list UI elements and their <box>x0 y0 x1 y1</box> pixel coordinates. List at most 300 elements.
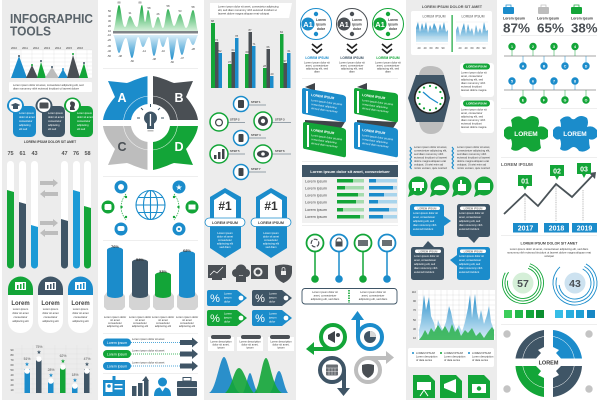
pill arrows: Lorem ipsum <box>107 364 127 368</box>
heading and text: ring charts: LOREM IPSUM DOLOR SIT AMET <box>521 242 578 246</box>
curl arrow blue <box>351 311 382 349</box>
mini text cards: dolor sit amet, <box>273 342 290 346</box>
quadrant diagram: D <box>174 140 184 154</box>
zigzag text columns: euismod tincidunt ut laoreet <box>457 156 490 160</box>
speech bubble blue bottom right: adipiscing elit, sed <box>459 262 481 266</box>
globe network <box>102 180 198 236</box>
star bar chart: ★ <box>73 377 78 384</box>
chevrons and labels <box>304 44 401 74</box>
stats: briefcase percentages: 65% <box>537 20 564 36</box>
line chart with callouts: 01 <box>521 178 529 186</box>
zigzag text columns: volutpat. Ut wisi enim ad <box>414 162 444 166</box>
icon callout: dark: consectetur <box>48 119 62 123</box>
percent tag blue 2 <box>252 310 292 326</box>
area chart: positive green and negative blue: -47 <box>180 56 184 60</box>
pill: dark lorem <box>38 276 63 333</box>
line chart with callouts: 02 <box>553 168 561 176</box>
grouped bar chart: 88 <box>211 19 214 23</box>
area chart: positive green and negative blue: -14 <box>142 49 146 53</box>
area chart: positive green and negative blue <box>107 0 198 64</box>
icon callout: blue: elit sed <box>19 127 28 131</box>
arrows: grey exchange <box>40 179 58 237</box>
chevrons and labels: adipiscing elit, sed <box>377 66 399 70</box>
3D ribbons: consectetur adipiscing <box>362 137 388 145</box>
3D columns chart: 76% <box>111 244 119 249</box>
grouped bar chart: 84 <box>280 30 283 34</box>
vertical bar values: 43 <box>31 151 38 157</box>
heading and text: ring charts <box>507 242 591 258</box>
chevrons and labels: diam <box>349 70 356 74</box>
dual spark charts: 20 <box>458 46 462 50</box>
speech bubble dark top right <box>457 204 490 243</box>
text bar <box>302 288 397 304</box>
A1 ring dark: dolor <box>353 27 362 31</box>
3D columns chart: sit amet <box>135 318 145 322</box>
grouped bar chart: 66 <box>266 45 270 49</box>
ring chart green 57 <box>497 257 549 309</box>
vertical bar values <box>7 151 91 157</box>
A1 ring dark <box>336 8 368 40</box>
watch text card 2 <box>460 100 494 133</box>
area chart: positive green and negative blue: -40 <box>107 49 111 53</box>
quadrant diagram: A <box>117 91 127 105</box>
A1 ring blue <box>300 8 332 40</box>
3D ribbons: LOREM IPSUM <box>311 93 335 100</box>
step cycle: STEP 7 <box>251 167 261 171</box>
star bar chart: 40 <box>10 373 14 377</box>
zigzag text columns: dolore magna aliquam erat <box>457 159 489 163</box>
zigzag text columns: sed diam nonummy nibh <box>457 152 487 156</box>
caption box column 3 <box>210 3 292 18</box>
area chart: positive green and negative blue: -48 <box>152 57 156 61</box>
icon callout: blue <box>7 98 36 137</box>
speech bubble blue top left: diam nonummy nibh <box>413 223 437 227</box>
chevrons and labels: LOREM IPSUM <box>376 56 400 60</box>
speech bubble blue top left: LOREM IPSUM <box>418 206 437 210</box>
grouped bar chart <box>211 19 291 88</box>
speech bubble blue bottom right: diam nonummy nibh <box>459 266 483 270</box>
3D columns chart: Lorem ipsum dolor <box>176 315 198 319</box>
speech bubble dark bottom left <box>411 241 444 280</box>
vertical bar values: 58 <box>84 151 91 157</box>
A1 ring blue: A1 <box>303 20 313 29</box>
area chart: positive green and negative blue: 40 <box>108 14 111 18</box>
timeline 1: 3 <box>553 45 555 49</box>
icon: globe <box>136 190 165 220</box>
icon callout: blue: adipiscing <box>19 123 31 127</box>
zigzag text columns: sed diam nonummy nibh <box>414 152 444 156</box>
jagged area chart: 50 <box>413 318 416 322</box>
panel: column 3 background <box>204 0 296 400</box>
icon callout: dark: adipiscing <box>48 123 60 127</box>
title: INFOGRAPHIC <box>10 12 93 26</box>
chart legend: Lorem description <box>472 354 494 358</box>
chevrons and labels: adipiscing elit, sed <box>306 66 328 70</box>
speech bubble dark bottom left: amet, consectetuer <box>414 258 436 262</box>
dual spark charts: 90 <box>482 46 486 50</box>
icon circles: blue <box>114 180 186 236</box>
star bar chart: 18% <box>72 373 78 377</box>
triangle chart: 2013 <box>44 46 50 50</box>
caption box: diam nonummy nibh euismod tincidunt ut laoreet dolore <box>13 86 80 90</box>
quadrant C <box>103 126 148 170</box>
vertical bar values: 47 <box>61 151 68 157</box>
speech bubble dark top right: amet, consectetuer <box>459 215 481 219</box>
icon: cloud <box>232 264 250 282</box>
3D columns chart: consectetur <box>133 321 147 325</box>
3D columns chart: adipiscing elit <box>155 324 171 328</box>
3D columns chart: adipiscing elit <box>179 324 195 328</box>
timeline 2: O <box>585 98 588 102</box>
3D columns chart: sit amet <box>182 318 192 322</box>
timeline 2: F <box>543 98 546 102</box>
grouped bar chart: 37 <box>284 59 287 63</box>
quadrant A <box>103 76 148 120</box>
star bar chart: ★ <box>61 358 66 365</box>
percent tag green: Lorem <box>224 312 233 316</box>
star bar chart: ★ <box>85 361 90 368</box>
star bar chart: 28% <box>48 368 54 372</box>
speech bubble dark top right: adipiscing elit, sed <box>459 219 481 223</box>
step cycle <box>210 96 291 180</box>
lower quadrant circle: LOREM <box>539 360 559 366</box>
panel: column 1 background <box>2 0 98 400</box>
line chart with callouts <box>504 163 597 232</box>
percent tag green <box>207 310 247 326</box>
A1 ring green: dolor <box>389 27 398 31</box>
watch text card 1: amet, consectetur <box>461 74 482 78</box>
grouped bar chart: 78 <box>235 34 238 38</box>
dual spark charts: 40 <box>464 46 468 50</box>
icon callout: green: adipiscing <box>77 123 89 127</box>
dual spark charts: 80 <box>476 46 480 50</box>
3D ribbons: consectetur adipiscing <box>362 102 388 110</box>
watch <box>408 66 450 134</box>
curl arrow dark <box>320 358 350 396</box>
panel: column 5 background <box>406 0 497 400</box>
title <box>10 12 93 38</box>
hexagon badge right <box>251 188 291 258</box>
speech bubble blue top left: Lorem ipsum dolor sit <box>413 211 438 215</box>
3D ribbons: LOREM IPSUM <box>362 93 386 100</box>
mini text cards: ipsum <box>217 346 225 350</box>
chart legend: LOREM IPSUM <box>472 351 492 355</box>
pill: dark lorem: Lorem ipsum <box>43 307 59 311</box>
grouped bar chart: 71 <box>252 42 256 46</box>
pill: dark lorem: adipiscing elit <box>42 319 59 323</box>
3D ribbons: Lorem ipsum dolor sit amet <box>362 98 394 106</box>
caption box column 3: Lorem ipsum dolor sit amet, consectetur adipiscing <box>218 4 279 8</box>
icon: growth chart <box>132 376 149 396</box>
pill: blue lorem: Lorem <box>71 301 90 307</box>
star bar chart: 90 <box>10 348 14 352</box>
3D ribbons: Lorem ipsum dolor sit amet <box>311 98 343 106</box>
quadrant B <box>153 76 198 120</box>
star bar chart: 51% <box>24 357 30 361</box>
chevrons and labels: amet, consectetuer <box>341 64 364 68</box>
area chart: positive green and negative blue: 50 <box>108 9 111 13</box>
mini text cards: Lorem description <box>239 340 261 344</box>
triangle chart: 2015 <box>66 46 72 50</box>
icon: safe <box>251 265 268 279</box>
vertical bar values: 75 <box>7 151 14 157</box>
3D ribbons: LOREM IPSUM <box>362 128 386 135</box>
chart legend: of data series <box>444 358 461 362</box>
table with progress bars: Lorem ipsum <box>305 194 327 198</box>
area chart: positive green and negative blue: 53 <box>178 9 182 13</box>
icon callout: green <box>64 98 93 137</box>
speech bubble dark bottom left: euismod tincidunt <box>414 270 434 274</box>
hexagon badge right: adipiscing elit <box>263 242 279 246</box>
icon: monitor <box>208 265 226 280</box>
A1 ring blue: Lorem <box>316 18 326 22</box>
dual spark charts: 80 <box>436 46 439 50</box>
grouped bar chart: 20 <box>270 72 274 76</box>
watch text card 1: LOREM IPSUM <box>466 64 487 68</box>
jagged area chart: 70 <box>413 308 416 312</box>
percent tag blue: ipsum <box>224 296 232 300</box>
A1 ring blue: ipsum <box>316 22 326 26</box>
stats: briefcase percentages: Lorem ipsum <box>571 16 593 20</box>
triangle chart: 2012 <box>33 46 39 50</box>
mini text cards: ipsum <box>246 346 254 350</box>
title: TOOLS <box>10 24 51 38</box>
timeline 1: D <box>585 64 588 68</box>
3D columns chart: consectetur <box>156 321 170 325</box>
timeline 2: 8 <box>574 80 576 84</box>
caption box column 3: elit, sed diam nonummy nibh euismod tincidunt ut <box>218 8 277 12</box>
puzzle blue: LOREM <box>563 131 587 138</box>
pill: green lorem: Lorem <box>11 301 30 307</box>
dual spark charts: 90 <box>442 46 445 50</box>
watch text card 1: laoreet dolore magna <box>461 88 487 92</box>
speech bubble dark top right: LOREM IPSUM <box>464 206 483 210</box>
grouped bar chart: 87 <box>248 28 252 32</box>
percent tag blue 2: % <box>255 313 265 325</box>
step cycle: STEP 3 <box>275 118 285 122</box>
grouped bar chart: 64 <box>232 48 235 52</box>
area chart: positive green and negative blue: 58 <box>192 5 195 9</box>
hexagon badge left: #1 <box>218 199 232 213</box>
star bar chart: ★ <box>25 361 30 368</box>
area chart: positive green and negative blue: -10 <box>107 33 111 37</box>
line chart with callouts: 2018 <box>549 226 564 232</box>
watch text card 2: euismod tincidunt <box>461 122 482 126</box>
chevrons and labels: Lorem ipsum dolor sit <box>304 60 330 64</box>
triangle chart: 2014 <box>55 46 61 50</box>
pill: dark lorem: dolor sit amet <box>42 311 59 315</box>
chart legend <box>408 348 494 367</box>
ring chart blue 43: 43 <box>569 278 581 290</box>
3D columns chart: consectetur <box>180 321 194 325</box>
percent tag dark: dolor <box>269 300 275 304</box>
caption box <box>9 82 92 92</box>
ring chart green 57: 57 <box>517 278 529 290</box>
3D columns chart: 68% <box>183 248 191 253</box>
icon callout: dark <box>36 98 65 137</box>
chart legend: Lorem description <box>416 354 438 358</box>
pill arrows <box>103 337 198 371</box>
triangle chart <box>10 46 92 78</box>
area chart: positive green and negative blue: 10 <box>108 29 111 33</box>
puzzle green <box>504 116 548 152</box>
icon: folded green sheet with presentation <box>413 375 435 398</box>
hexagon badge right: Lorem ipsum <box>263 231 280 235</box>
speech bubble blue top left: euismod tincidunt <box>413 227 433 231</box>
speech bubble dark bottom left: LOREM IPSUM <box>419 250 438 254</box>
area chart: positive green and negative blue: -20 <box>107 38 111 42</box>
timeline 1: B <box>543 64 546 68</box>
star bar chart: 10 <box>10 388 14 392</box>
step cycle: STEP 4 <box>251 133 261 137</box>
icon callout: blue: dolor sit amet <box>19 115 35 119</box>
3D columns chart: sit amet <box>158 318 168 322</box>
zigzag text columns: consectetuer adipiscing elit, <box>457 148 490 152</box>
zigzag text columns: minim veniam, quis nostrud <box>457 166 490 170</box>
percent tag blue <box>207 290 247 306</box>
zigzag text columns: Lorem ipsum dolor sit amet, <box>457 145 490 149</box>
chevrons and labels: amet, consectetuer <box>306 64 329 68</box>
3D columns chart: Lorem ipsum dolor <box>104 315 126 319</box>
3D ribbons: consectetur adipiscing <box>311 137 337 145</box>
star bar chart: ★ <box>37 349 42 356</box>
speech bubble blue bottom right <box>450 247 490 280</box>
grouped bar chart: 37 <box>228 60 231 64</box>
icon callout: dark: dolor sit amet <box>48 115 64 119</box>
globe network: ★ <box>175 183 183 192</box>
percent tag blue 2: dolor <box>269 320 275 324</box>
zigzag text columns: minim veniam, quis nostrud <box>414 166 447 170</box>
icon: briefcase <box>177 378 197 396</box>
area chart: positive green and negative blue: 88 <box>118 0 121 4</box>
area chart: positive green and negative blue: 88 <box>138 0 142 4</box>
pill: green lorem: adipiscing elit <box>12 319 29 323</box>
watch text card 1: Lorem ipsum dolor sit <box>461 70 487 74</box>
star bar chart: 70 <box>10 358 14 362</box>
watch text card 1: diam nonummy nibh <box>461 81 486 85</box>
dual spark charts <box>411 11 492 55</box>
speech bubble dark top right: euismod tincidunt <box>459 227 479 231</box>
hexagon badge left: consectetur <box>218 238 232 242</box>
3D ribbons: LOREM IPSUM <box>311 128 335 135</box>
speech bubble blue top left: amet, consectetuer <box>413 215 435 219</box>
chart legend: Lorem description <box>444 354 466 358</box>
star bar chart: 62% <box>60 354 66 358</box>
pill: dark lorem: Lorem <box>41 301 60 307</box>
A1 ring green: Lorem <box>388 18 398 22</box>
vertical bar values: 76 <box>73 151 79 157</box>
area chart: positive green and negative blue: -50 <box>107 54 111 58</box>
3D ribbons <box>302 83 398 157</box>
area chart: positive green and negative blue: -30 <box>107 44 111 48</box>
3D columns chart: 53% <box>136 257 144 262</box>
pill: blue lorem: dolor sit amet <box>72 311 89 315</box>
star bar chart <box>10 345 92 393</box>
timeline 1: 1 <box>511 45 513 49</box>
watch text card 1: euismod tincidunt <box>461 84 482 88</box>
area chart: positive green and negative blue: 30 <box>108 19 111 23</box>
colour swatches <box>504 310 595 318</box>
area chart: positive green and negative blue: 31 <box>128 11 132 15</box>
3D columns chart: Lorem ipsum dolor <box>152 315 174 319</box>
timeline 2 <box>504 77 596 104</box>
percent tag green: ipsum <box>224 316 232 320</box>
percent tag blue: dolor <box>224 300 230 304</box>
A1 ring green: A1 <box>375 20 385 29</box>
percent tag blue: % <box>210 293 220 305</box>
dual spark charts: 40 <box>424 46 427 50</box>
quadrant diagram: B <box>174 91 184 105</box>
jagged area chart: 90 <box>413 299 416 303</box>
percent tag blue 2: Lorem <box>269 312 278 316</box>
percent tag dark <box>252 290 292 306</box>
3D columns chart: adipiscing elit <box>132 324 148 328</box>
table with progress bars: Lorem ipsum <box>305 186 327 190</box>
speech bubble blue bottom right: LOREM IPSUM <box>464 250 483 254</box>
pill: blue lorem: Lorem ipsum <box>73 307 89 311</box>
triangle chart: 2011 <box>22 46 28 50</box>
area chart: positive green and negative blue: -60 <box>170 60 174 64</box>
percent tag blue 2: ipsum <box>269 316 277 320</box>
area chart: positive green and negative blue: -60 <box>130 59 134 63</box>
watch text card 2: diam nonummy nibh <box>461 118 486 122</box>
hexagon badge left: adipiscing elit <box>217 242 233 246</box>
text bar: Lorem ipsum dolor sit <box>360 290 386 294</box>
chart legend: of data series <box>472 358 489 362</box>
3D ribbons: elit sed diam nonummy <box>311 141 339 149</box>
puzzle green: LOREM <box>514 131 538 138</box>
watch text card 2: adipiscing elit, sed <box>461 114 483 118</box>
3D ribbons: consectetur adipiscing <box>311 102 337 110</box>
curl arrow grey <box>356 351 394 382</box>
hexagon badge right: LOREM IPSUM <box>258 221 284 225</box>
jagged area chart: 10 <box>413 336 416 340</box>
chevrons and labels: diam <box>385 70 392 74</box>
quadrant diagram: C <box>117 140 127 154</box>
heading and text: ring charts: volutpat <box>544 254 554 258</box>
grouped bar chart: 52 <box>218 49 222 53</box>
timeline 1: A <box>522 64 525 68</box>
text bar: adipiscing elit, sed diam <box>359 297 388 301</box>
pill arrows: Lorem ipsum dolor sit amet <box>132 360 165 364</box>
pin markers <box>306 234 396 283</box>
icon callout: green: elit sed <box>77 127 86 131</box>
mini text cards: Lorem description <box>270 340 292 344</box>
timeline 1: 4 <box>574 45 576 49</box>
3D ribbons: Lorem ipsum dolor sit amet <box>362 133 394 141</box>
step cycle: STEP 1 <box>251 100 261 104</box>
star bar chart: 47% <box>84 357 90 361</box>
zigzag text columns: euismod tincidunt ut laoreet <box>414 156 447 160</box>
icon callout: green: Lorem ipsum <box>77 111 92 115</box>
icon callout: blue: consectetur <box>19 119 33 123</box>
A1 ring dark: A1 <box>339 20 349 29</box>
percent tag dark: Lorem <box>269 292 278 296</box>
timeline 2: 7 <box>553 80 555 84</box>
heading: bars: LOREM IPSUM DOLOR SIT AMET <box>24 140 76 144</box>
speech bubble dark top right: Lorem ipsum dolor sit <box>459 211 484 215</box>
pill: dark lorem: consectetur <box>44 315 58 319</box>
icon circles: green <box>102 200 198 214</box>
icon: shield lock <box>275 264 292 283</box>
table with progress bars: Lorem ipsum <box>305 215 327 219</box>
jagged area chart <box>412 290 495 340</box>
step cycle: STEP 5 <box>230 149 240 153</box>
speech bubble dark bottom left: diam nonummy nibh <box>414 266 438 270</box>
zigzag text columns: Lorem ipsum dolor sit amet, <box>414 145 447 149</box>
pill arrows: Lorem ipsum dolor sit amet <box>132 337 165 341</box>
jagged area chart: 30 <box>413 327 416 331</box>
